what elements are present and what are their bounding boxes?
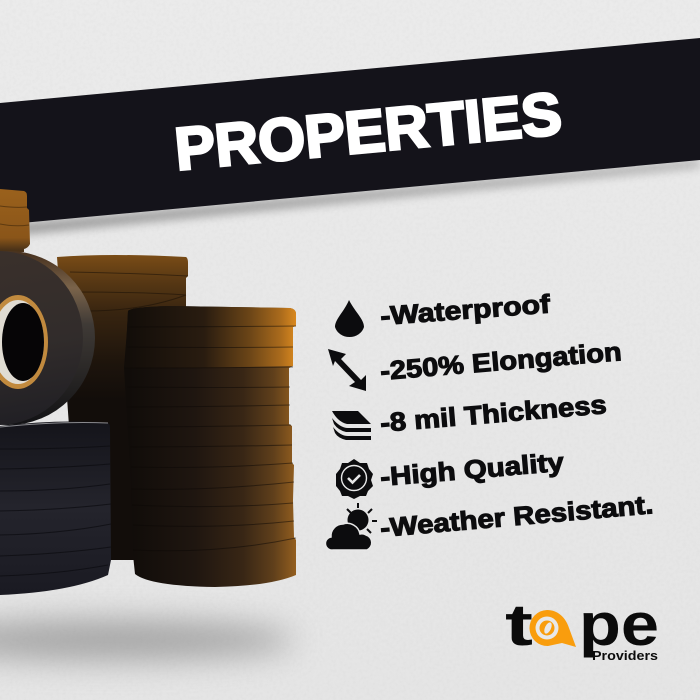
big stack — [124, 306, 296, 587]
icon: layers — [332, 411, 371, 440]
tape stacks photo — [0, 189, 296, 595]
icon: sun and cloud — [325, 503, 377, 550]
item: quality: -High Quality — [379, 447, 565, 492]
banner shadow — [0, 161, 700, 236]
item: thickness: -8 mil Thickness — [379, 389, 608, 438]
item: waterproof — [335, 289, 551, 337]
item: weather — [325, 489, 654, 550]
properties list — [325, 289, 654, 550]
floor shadow — [0, 620, 295, 660]
logo: tape Providers — [505, 591, 659, 663]
item: quality — [336, 447, 565, 499]
icon: water drop — [335, 300, 364, 337]
icon: badge with check — [336, 459, 373, 499]
item: thickness — [332, 389, 608, 440]
item: elongation — [328, 336, 623, 391]
banner — [0, 38, 700, 225]
logo letter t: t — [505, 593, 533, 658]
small orange stack top left — [0, 189, 30, 254]
item: waterproof: -Waterproof — [379, 289, 551, 331]
item: elongation: -250% Elongation — [379, 336, 623, 386]
black stack — [0, 422, 111, 595]
title: PROPERTIES — [172, 80, 565, 183]
roll core — [0, 295, 48, 389]
logo tape roll a — [529, 610, 576, 647]
logo word Providers: Providers — [592, 649, 658, 663]
back orange stack — [57, 255, 188, 560]
logo letters pe: pe — [579, 591, 659, 658]
front roll with core — [0, 251, 95, 425]
item: weather: -Weather Resistant. — [379, 489, 654, 543]
icon: double arrow — [328, 349, 366, 391]
